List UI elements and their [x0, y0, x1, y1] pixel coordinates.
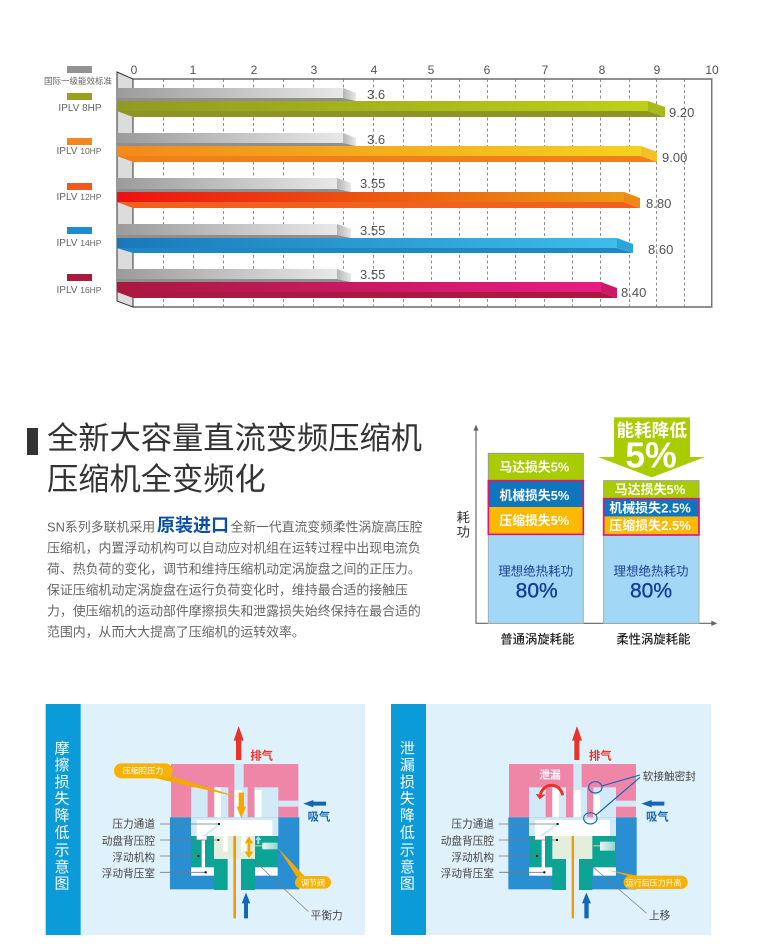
side title: 降 [55, 808, 70, 825]
arrow: inflow bottom [582, 893, 591, 918]
row: 10HP bars [117, 132, 687, 165]
row: 10HP bars: 3.6 [367, 132, 385, 147]
standard scroll stack: 压缩损失5% [499, 513, 570, 528]
arrow: exhaust: 排气 [589, 748, 612, 762]
panel: friction loss reduction [46, 704, 365, 935]
standard scroll stack: 机械损失5% [499, 488, 570, 503]
part labels [102, 818, 220, 880]
body text [47, 516, 423, 640]
flexible scroll stack: 理想绝热耗功 [614, 564, 688, 579]
panel: leakage loss reduction [391, 704, 711, 935]
body text: 保证压缩机动定涡旋盘在运行负荷变化时，维持最合适的接触压 [47, 582, 408, 598]
axis numbers: 5 [428, 63, 435, 77]
axis numbers: 9 [654, 63, 661, 77]
side title: 失 [400, 791, 415, 808]
side title: 意 [55, 858, 69, 876]
side title: 损 [400, 774, 415, 791]
row: 12HP bars: 3.55 [360, 176, 385, 191]
callout: compression chamber pressure: 压缩腔压力 [123, 765, 163, 775]
body text: 全新一代直流变频柔性涡旋高压腔 [230, 520, 423, 534]
chart axes [476, 430, 712, 623]
side title: 低 [400, 824, 415, 841]
arrow: small pressure up [255, 836, 261, 844]
bar chart: IPLV comparison [44, 63, 719, 307]
part labels [441, 818, 559, 880]
legend: IPLV 8HP [58, 103, 102, 114]
flexible scroll stack: 机械损失2.5% [609, 501, 691, 516]
arrow: exhaust [234, 726, 274, 762]
callout: regulating valve: 调节阀 [301, 878, 325, 887]
arrow: intake [641, 800, 669, 824]
flexible scroll stack [604, 481, 699, 623]
side title: 泄 [400, 740, 415, 757]
heading: 全新大容量直流变频压缩机 [47, 421, 422, 456]
part labels: 动盘背压腔 [102, 834, 155, 847]
bar captions: 柔性涡旋耗能 [616, 631, 690, 646]
side title: 摩 [55, 739, 70, 757]
label: moves up: 上移 [649, 909, 671, 922]
flexible scroll stack: 压缩损失2.5% [609, 518, 691, 533]
body text: 压缩机，内置浮动机构可以自动应对机组在运转过程中出现电流负 [47, 540, 421, 556]
chart left 3D wall [117, 72, 133, 307]
stacked bar chart: power consumption [457, 417, 717, 646]
label: moves up [585, 860, 671, 922]
arrow: intake [303, 800, 331, 824]
side title: 意 [400, 858, 415, 876]
y axis label [457, 510, 470, 540]
row: 16HP bars [117, 267, 646, 300]
callout: compression chamber pressure [114, 763, 239, 797]
heading [47, 421, 422, 497]
arrow: exhaust [572, 726, 612, 762]
panel background [81, 704, 365, 935]
axis numbers: 8 [599, 63, 606, 77]
side title: 降 [400, 808, 415, 825]
label: balancing force: 平衡力 [311, 909, 343, 922]
body text: 荷、热负荷的变化，调节和维持压缩机动定涡旋盘之间的正压力。 [47, 562, 421, 576]
flexible scroll stack: 80% [630, 579, 672, 602]
heading marker [27, 428, 38, 455]
leakage label and curved arrow: 泄漏 [539, 769, 561, 782]
arrow: balance both ways [245, 837, 253, 858]
side title [391, 704, 426, 935]
row: 12HP bars: 8.80 [646, 196, 671, 211]
row: 16HP bars: 3.55 [360, 267, 385, 282]
arrow: intake: 吸气 [646, 810, 669, 824]
row: 14HP bars: 3.55 [360, 223, 385, 238]
part labels: 浮动背压室 [102, 867, 155, 880]
standard scroll stack [488, 453, 583, 623]
arrow: exhaust: 排气 [250, 748, 274, 762]
side title: 擦 [55, 757, 70, 774]
side title: 示 [400, 842, 415, 859]
flexible scroll stack: 马达损失5% [615, 482, 686, 497]
side title [46, 704, 81, 935]
label: balancing force [252, 858, 343, 922]
standard scroll stack: 马达损失5% [499, 459, 570, 474]
callout: regulating valve [278, 848, 331, 889]
row: 12HP bars [117, 176, 671, 211]
row: 14HP bars: 8.60 [648, 242, 673, 257]
compressor diagram [170, 764, 299, 918]
axis numbers: 10 [705, 63, 719, 77]
part labels: 浮动机构 [451, 851, 494, 864]
callout: pressure rises after running [608, 870, 688, 889]
part labels: 浮动机构 [112, 851, 155, 864]
axis numbers: 6 [484, 63, 491, 77]
legend [44, 66, 112, 296]
side title: 示 [55, 842, 70, 859]
chart plot frame [133, 79, 712, 307]
soft contact seal markers [584, 770, 696, 824]
part labels: 压力通道 [112, 818, 155, 831]
compressor diagram [508, 764, 637, 918]
bar captions [500, 631, 690, 646]
standard scroll stack: 80% [516, 579, 558, 602]
side title: 损 [55, 774, 70, 791]
part labels: 压力通道 [451, 818, 494, 831]
legend: IPLV 12HP [57, 192, 102, 203]
legend: 国际一级能效标准 [44, 76, 112, 86]
axis numbers: 0 [131, 63, 138, 77]
arrow: energy reduced 5% [598, 417, 705, 477]
body text: 范围内，从而大大提高了压缩机的运转效率。 [47, 624, 305, 640]
heading: 压缩机全变频化 [47, 462, 266, 497]
callout: pressure rises after running: 运行后压力升高 [626, 877, 682, 887]
axis numbers [131, 63, 719, 77]
part labels: 动盘背压腔 [441, 834, 494, 847]
side title: 失 [55, 791, 70, 808]
body text: 力，使压缩机的运动部件摩擦损失和泄露损失始终保持在最合适的 [47, 604, 421, 618]
arrow: intake: 吸气 [308, 810, 331, 824]
axis numbers: 2 [251, 63, 258, 77]
row: 8HP bars: 9.20 [669, 105, 694, 120]
row: 10HP bars: 9.00 [662, 150, 687, 165]
y axis label: 功 [457, 525, 470, 540]
arrow: pressure down [237, 793, 246, 818]
axis numbers: 1 [190, 63, 197, 77]
arrow: energy reduced 5%: 5% [625, 435, 677, 475]
row: 8HP bars [117, 87, 694, 120]
leakage label and curved arrow [536, 769, 563, 799]
legend: IPLV 16HP [57, 285, 102, 296]
legend: IPLV 10HP [57, 146, 102, 157]
panel background [426, 704, 711, 935]
row: 8HP bars: 3.6 [367, 87, 385, 102]
side title: 漏 [400, 757, 415, 774]
axis numbers: 4 [371, 63, 378, 77]
side title: 图 [400, 876, 415, 893]
arrow: energy reduced 5%: 能耗降低 [616, 421, 687, 441]
part labels: 浮动背压室 [441, 867, 494, 880]
soft contact seal markers: 软接触密封 [643, 770, 696, 783]
arrow: inflow bottom [242, 893, 250, 918]
body text: SN系列多联机采用 [47, 520, 155, 534]
y axis label: 耗 [457, 510, 470, 525]
bar captions: 普通涡旋耗能 [500, 631, 574, 646]
axis numbers: 7 [542, 63, 549, 77]
side title: 图 [55, 876, 69, 893]
row: 16HP bars: 8.40 [621, 285, 646, 300]
legend: IPLV 14HP [57, 238, 102, 249]
row: 14HP bars [117, 223, 673, 257]
body text: 原装进口 [157, 516, 229, 536]
axis numbers: 3 [311, 63, 318, 77]
standard scroll stack: 理想绝热耗功 [498, 564, 573, 579]
side title: 低 [55, 824, 70, 841]
